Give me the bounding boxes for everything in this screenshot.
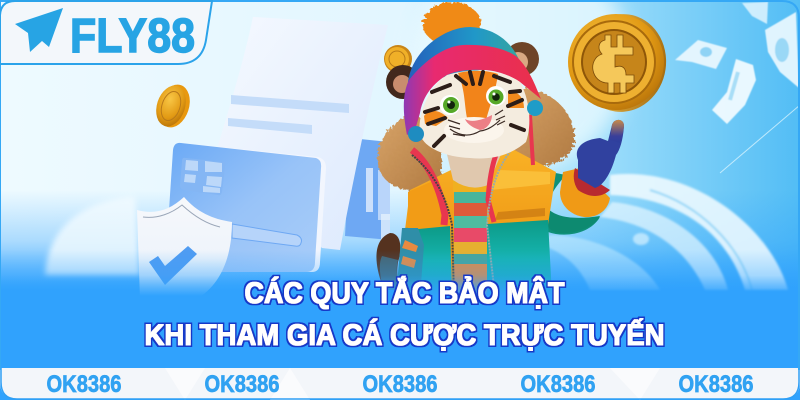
right ear [505,42,539,76]
tiger character [378,2,624,296]
left fur hood [378,113,442,190]
card stripe [232,224,302,246]
left hat pom [408,126,424,142]
receipt line 2 [228,118,312,134]
foreground fade to blue [0,250,800,380]
logo plane icon [15,8,63,52]
jacket body [396,145,556,296]
footer labels: OK8386 [362,371,438,398]
right fur hood [505,88,575,166]
left eye [440,95,460,115]
face [420,70,529,158]
decoration: floating banknotes [675,2,799,124]
decoration: roulette wheel right [540,174,788,290]
footer strip [0,368,800,400]
head fur orange [458,71,498,122]
footer labels: OK8386 [678,371,754,398]
striped shirt [453,176,488,296]
nose [465,115,492,130]
tiger stripes [425,72,524,146]
muzzle [444,117,504,143]
check mark [149,246,197,285]
right eye [486,86,506,106]
footer labels [46,371,754,398]
title line 1: CÁC QUY TẮC BẢO MẬT [244,276,564,310]
title line 2: KHI THAM GIA CÁ CƯỢC TRỰC TUYẾN [144,318,664,352]
neck [446,145,505,188]
footer labels: OK8386 [520,371,596,398]
footer labels: OK8386 [46,371,122,398]
credit card [168,143,326,272]
jacket sleeve [536,168,610,235]
tiger tail [376,233,402,290]
decoration: wheel left [45,196,140,275]
title [144,276,664,352]
large gold coin [568,8,672,118]
card chip [180,158,225,195]
footer labels: OK8386 [204,371,280,398]
coin symbol [593,35,634,93]
logo panel [0,1,212,64]
right hat pom [527,100,543,116]
shield icon [137,197,232,300]
hat blue band [408,27,520,82]
hat red band [404,45,541,135]
mouth and whiskers [448,110,505,136]
glove hand [574,120,624,196]
hood lining and strings [412,115,533,296]
left ear [386,65,420,99]
small coin behind ear [384,45,412,73]
receipt line 1 [231,95,349,113]
hat pompom [423,2,481,46]
small gold coin [151,80,195,132]
back card [345,138,390,244]
receipt [218,17,388,250]
logo wordmark: FLY88 [70,10,195,63]
